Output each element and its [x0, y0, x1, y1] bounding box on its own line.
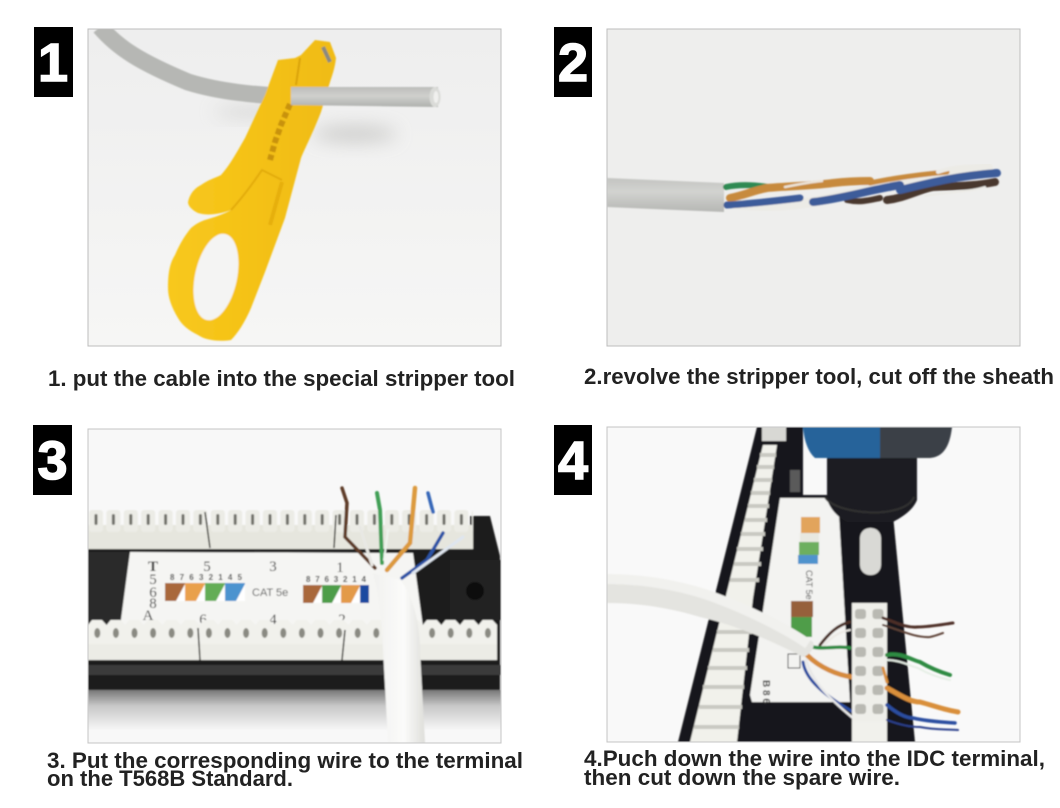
lower terminal strip: [88, 618, 497, 660]
panel border 4: [607, 427, 1020, 742]
cable sheath: [607, 178, 724, 212]
caption step 3: 3. Put the corresponding wire to the terminal: [47, 748, 523, 773]
wires left of terminal: [803, 622, 853, 718]
loose wires: [342, 488, 463, 578]
badge: step 3: 3: [37, 431, 68, 491]
black panel body: [678, 427, 915, 742]
slot in arm: [860, 528, 881, 575]
black panel body: [88, 516, 500, 690]
caption step 4: [584, 746, 1045, 790]
white label plate: 8 7 6 3 2 1 4: [306, 575, 367, 584]
panel: step 4 punch down tool: [608, 428, 962, 742]
panel: step 3 patch panel front view: [88, 484, 500, 742]
white label plate: 3: [269, 559, 277, 575]
white label plate: 6: [199, 612, 207, 628]
white label plate: 5: [203, 559, 211, 575]
tool head: [803, 427, 952, 522]
badge: step 2: [554, 27, 592, 97]
badge: step 4: [554, 425, 592, 495]
colour code strip A: [165, 583, 245, 601]
caption step 4: 4.Puch down the wire into the IDC terminal,: [584, 746, 1045, 771]
icon: yellow stripper tool: [168, 40, 336, 341]
grey cable behind tool: [100, 27, 295, 97]
grey cable tube in front: [291, 87, 440, 107]
white label plate: A: [143, 608, 154, 624]
right terminal block: [852, 603, 887, 742]
wires right of terminal: [883, 618, 958, 730]
badge: step 4: 4: [558, 431, 588, 491]
caption step 2: 2.revolve the stripper tool, cut off the sheath: [584, 364, 1054, 389]
badge: step 1: [34, 27, 73, 97]
panel: step 2 stripped cable: [607, 29, 1020, 346]
white label plate: 6: [149, 585, 157, 601]
badge: step 3: [33, 425, 72, 495]
white label plate: 8: [149, 596, 157, 612]
caption step 3: on the T568B Standard.: [47, 766, 293, 791]
caption step 3: [47, 748, 523, 791]
caption step 1: 1. put the cable into the special stripper tool: [48, 366, 515, 391]
twisted wire pairs: [726, 167, 997, 206]
white label plate: T: [148, 559, 158, 575]
white label plate: 4: [269, 612, 277, 628]
panel: step 1 cable in stripper tool: [88, 27, 501, 346]
panel border 3: [88, 429, 501, 743]
left terminal strip: [690, 445, 777, 742]
panel border 1: [88, 29, 501, 346]
white label plate: CAT 5e: [252, 587, 288, 599]
white label plate: 2: [338, 612, 346, 628]
badge: step 1: 1: [38, 33, 68, 93]
label plate: [750, 498, 850, 704]
badge: step 2: 2: [558, 33, 588, 93]
panel border 2: [607, 29, 1020, 346]
white cable: [607, 575, 814, 657]
label plate: CAT 5e: [804, 570, 814, 600]
colour code strip B: [303, 585, 369, 603]
white label plate: 8 7 6 3 2 1 4 5: [170, 573, 243, 582]
white label plate: [120, 552, 423, 628]
white label plate: 1: [336, 560, 344, 576]
white cable: [382, 616, 426, 742]
label plate: B 8 6: [760, 680, 771, 704]
floor shadow: [88, 690, 501, 730]
white label plate: 5: [149, 572, 157, 588]
upper terminal strip: [88, 508, 473, 549]
caption step 4: then cut down the spare wire.: [584, 765, 900, 790]
